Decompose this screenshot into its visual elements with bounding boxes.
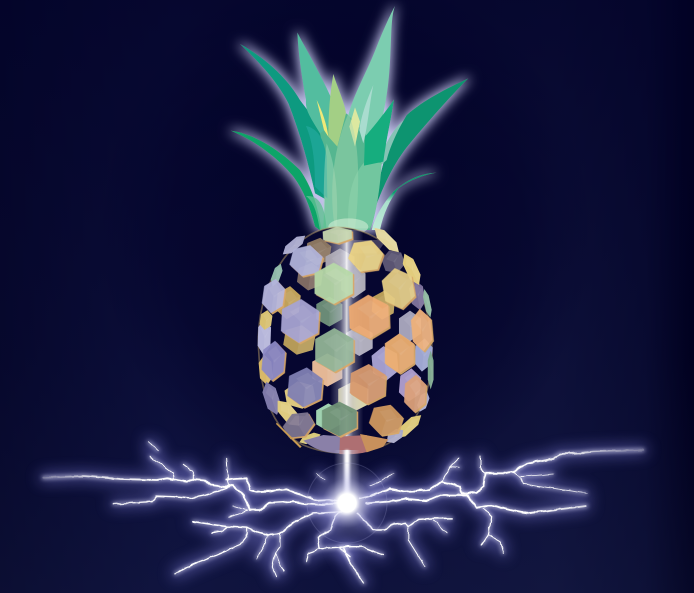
lightning bolts left: [43, 442, 350, 577]
leaf: far left dark teal: [240, 44, 327, 200]
leaf: far left bright green: [231, 131, 322, 232]
leaf: lower central mass: [320, 113, 382, 230]
leaf: lower translucent fans: [306, 113, 382, 235]
lightning bolts: [43, 442, 643, 583]
front hexagons: [261, 226, 433, 443]
leaf: centre lime: [328, 74, 346, 147]
lightning glow right: [340, 450, 643, 583]
lightning halo right: [340, 450, 643, 583]
lightning glow left: [43, 442, 350, 577]
pineapple body: [257, 224, 434, 454]
lightning halo left: [43, 442, 350, 577]
leaf: tall left: [297, 33, 333, 150]
leaf: yellow sliver: [317, 100, 328, 137]
leaf: pale yellow: [349, 107, 360, 147]
back hexagons: [257, 224, 434, 446]
impact flare: [305, 461, 389, 545]
leaf: teal inner: [306, 126, 327, 198]
pineapple crown leaves: [231, 6, 468, 235]
bottom left sliver: [276, 423, 302, 448]
vertical light beam inside body: [330, 230, 363, 453]
light beam below pineapple: [334, 450, 360, 508]
bottom band of plates: [303, 434, 388, 454]
leaf: bright green right: [364, 99, 394, 166]
leaf: tall centre right: [347, 6, 395, 147]
body silhouette: [258, 227, 432, 453]
lightning bolts right: [340, 450, 643, 583]
leaf: right dark green: [375, 78, 468, 208]
leaf: pale blue: [359, 85, 373, 143]
leaf: pale right: [379, 120, 403, 167]
leaf: small right curl: [372, 173, 437, 230]
